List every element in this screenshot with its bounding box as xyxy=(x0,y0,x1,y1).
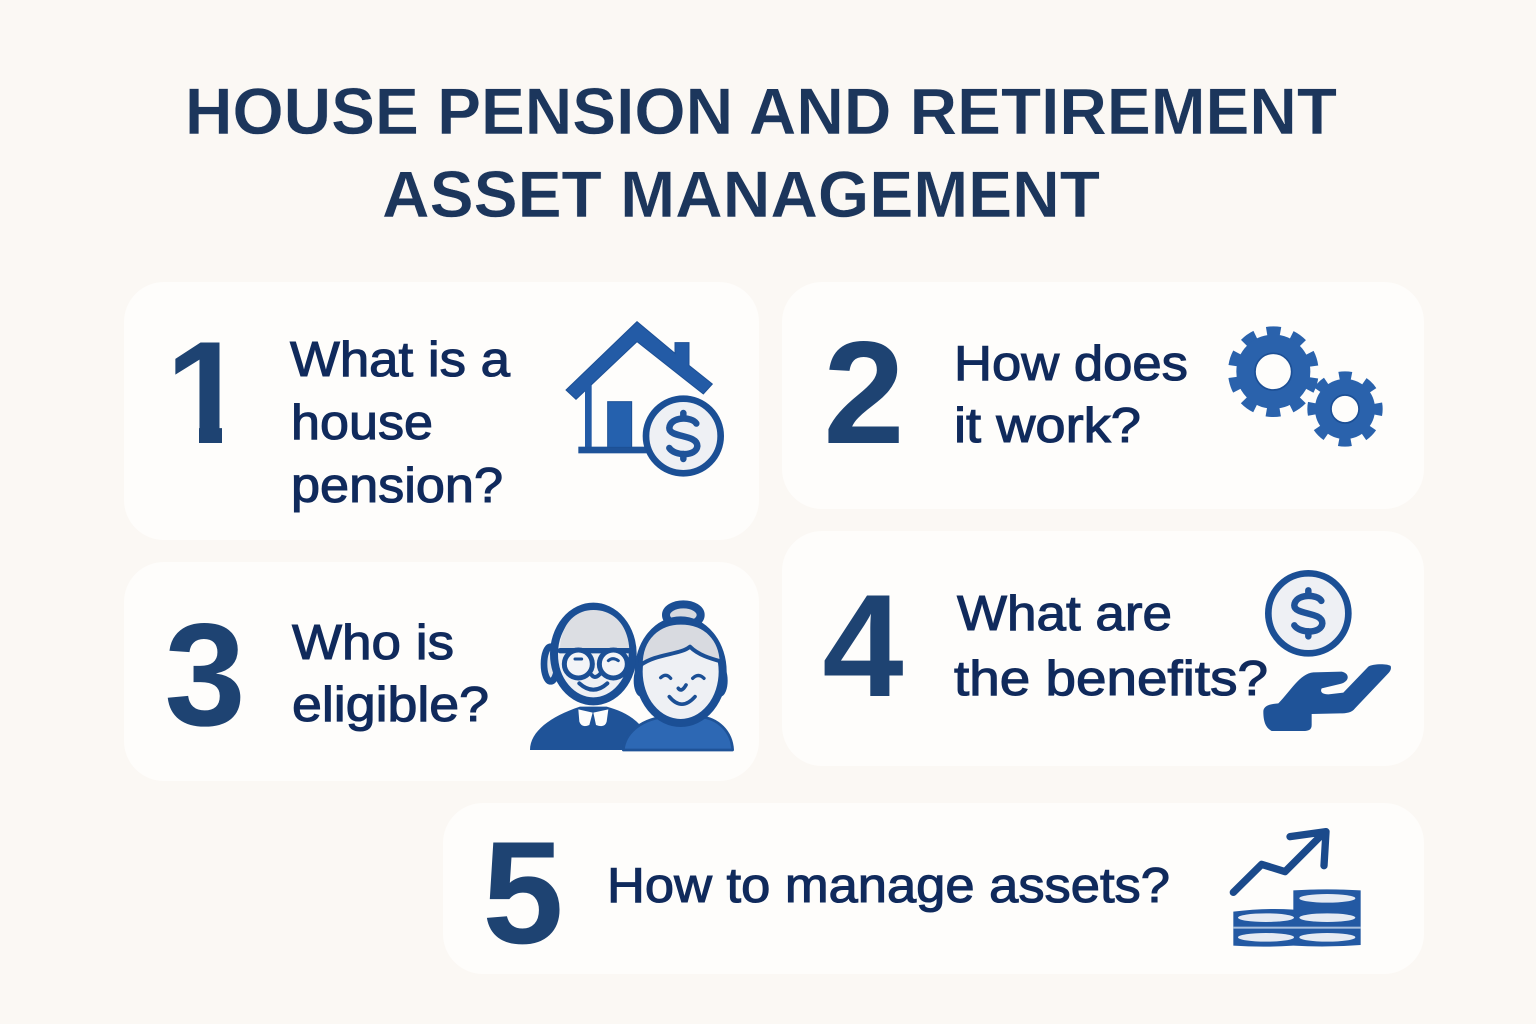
question 2 text: it work? xyxy=(954,399,1141,453)
icon: elderly couple xyxy=(530,604,733,750)
icon: hand with dollar coin xyxy=(1263,573,1391,731)
woman xyxy=(623,604,733,750)
question 4 text: What are xyxy=(957,587,1172,641)
question 3 text: eligible? xyxy=(292,678,489,732)
question 5 text: How to manage assets? xyxy=(607,859,1170,913)
question 4 text: the benefits? xyxy=(954,652,1268,706)
title: HOUSE PENSION AND RETIREMENT xyxy=(185,74,1337,148)
question 2 text: How does xyxy=(954,337,1188,391)
icon: house with dollar coin xyxy=(566,322,721,473)
question 1 text xyxy=(290,333,511,513)
panel 5: how to manage assets xyxy=(443,803,1424,974)
question 1 text: What is a xyxy=(290,333,511,387)
question 4 text xyxy=(954,587,1268,706)
number 3: 3 xyxy=(164,593,246,756)
number 1: 1 xyxy=(165,311,247,474)
panel 3: who is eligible xyxy=(124,562,759,781)
panel 1: what is a house pension xyxy=(124,282,759,540)
icon: gears xyxy=(1224,322,1377,441)
title xyxy=(185,74,1337,231)
icon: growth arrow over coin stacks xyxy=(1233,832,1361,947)
panel 2: how does it work xyxy=(782,282,1424,509)
panel 4: what are the benefits xyxy=(782,531,1424,766)
question 3 text: Who is xyxy=(292,616,454,670)
man xyxy=(530,607,652,750)
number 5: 5 xyxy=(482,811,564,974)
title: ASSET MANAGEMENT xyxy=(382,157,1100,231)
number 4: 4 xyxy=(822,564,904,727)
question 2 text xyxy=(954,337,1188,453)
question 1 text: pension? xyxy=(291,459,503,513)
question 1 text: house xyxy=(291,396,433,450)
number 2: 2 xyxy=(823,311,905,474)
question 3 text xyxy=(292,616,489,732)
